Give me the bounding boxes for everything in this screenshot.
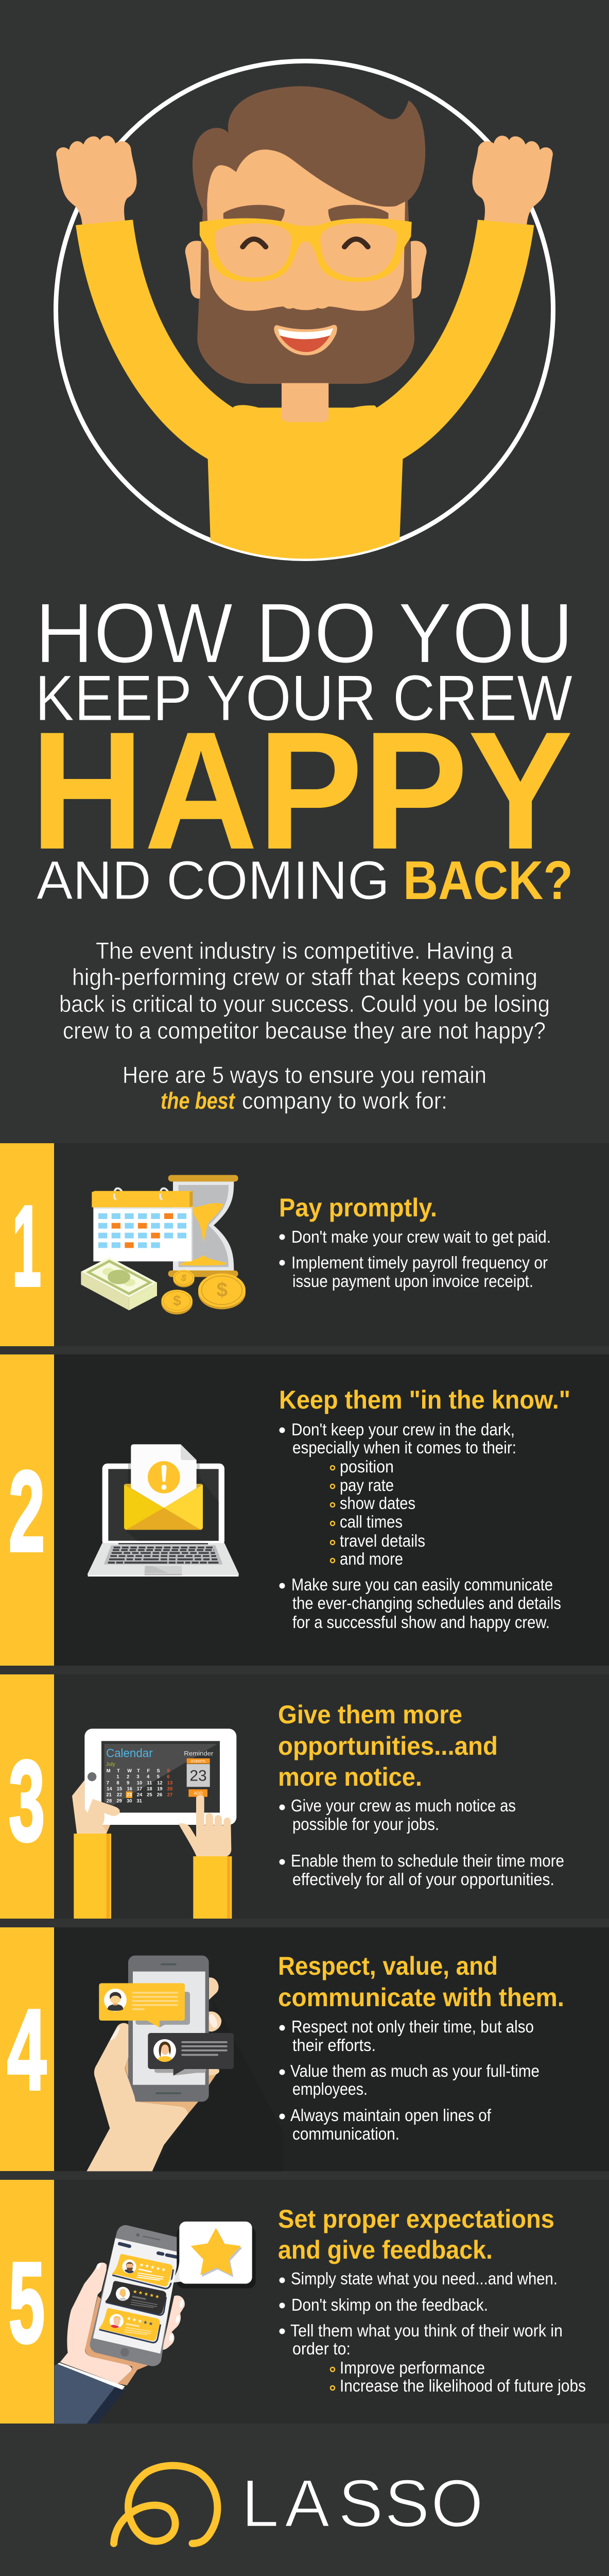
panel: step 1 pay promptly: [0, 1143, 609, 1346]
icon: hands holding tablet calendar: 24: [137, 1792, 143, 1798]
icon: hand holding phone with star reviews: [55, 2222, 256, 2424]
icon: hand holding phone with star reviews: ★: [145, 2264, 149, 2269]
bullet: keep crew informed: Don't keep your crew in the dark,: [291, 1420, 515, 1439]
intro call to action: Here are 5 ways to ensure you remain: [123, 1062, 486, 1088]
bullet list: issue payment upon invoice receipt.: [292, 1272, 533, 1291]
number bar 5: 5: [9, 2239, 45, 2367]
icon: hands holding tablet calendar: 31: [136, 1798, 142, 1803]
icon: hands holding tablet calendar: W: [127, 1768, 132, 1773]
number bar 4: [0, 1927, 54, 2171]
title: [30, 586, 573, 911]
face: [207, 149, 405, 311]
icon: hands holding tablet calendar: [72, 1728, 236, 1919]
bullet list: [279, 2269, 586, 2395]
sub-list: details: show dates: [340, 1494, 415, 1513]
bullet list: Value them as much as your full-time: [290, 2061, 540, 2080]
panel: step 2 keep them in the know: [0, 1354, 609, 1666]
icon: hand holding phone with star reviews: ★: [132, 2317, 137, 2323]
glasses: [200, 218, 412, 282]
bullet list: possible for your jobs.: [292, 1815, 439, 1834]
bullet list: Give your crew as much notice as: [291, 1796, 516, 1815]
icon: hands holding tablet calendar: 14: [107, 1786, 112, 1791]
bullet: keep crew informed: especially when it comes to their:: [292, 1438, 516, 1457]
bullet: communicate schedules: [279, 1575, 561, 1632]
bullet list: Simply state what you need...and when.: [291, 2269, 558, 2288]
heading: give them more opportunities: opportunities...and: [278, 1732, 498, 1760]
icon: hand holding phone with star reviews: ★: [143, 2320, 148, 2326]
icon: hand holding phone with chat bubbles: [86, 1956, 283, 2171]
icon: hands holding tablet calendar: 1: [116, 1774, 119, 1780]
icon: hand holding phone with star reviews: ★: [150, 2265, 155, 2270]
number bar 3: 3: [9, 1737, 45, 1865]
bullet list: Respect not only their time, but also: [291, 2017, 534, 2036]
icon: hands holding tablet calendar: 10: [137, 1780, 142, 1785]
bullet: communicate schedules: Make sure you can easily communicate: [291, 1575, 553, 1594]
heading: set proper expectations: [278, 2205, 554, 2264]
raised arms and shoulders: [76, 220, 534, 459]
icon: hands holding tablet calendar: 2: [127, 1774, 129, 1780]
bullet: keep crew informed: [279, 1420, 516, 1457]
icon: hand holding phone with star reviews: ★: [127, 2316, 131, 2322]
icon: hand holding phone with star reviews: ★: [155, 2294, 160, 2300]
icon: hands holding tablet calendar: 27: [167, 1792, 172, 1798]
icon: calendar, hourglass and money: [81, 1175, 246, 1314]
intro paragraph: [59, 938, 550, 1044]
icon: hand holding phone with star reviews: ★: [144, 2292, 149, 2297]
number bar 1: [0, 1143, 54, 1346]
panel: step 3 give more opportunities: [0, 1674, 609, 1919]
icon: hands holding tablet calendar: 15: [117, 1786, 122, 1791]
bullet list: employees.: [292, 2079, 368, 2098]
intro paragraph: high-performing crew or staff that keeps coming: [72, 964, 537, 990]
heading: set proper expectations: and give feedback.: [278, 2235, 493, 2264]
sub-list: details: position: [340, 1457, 394, 1476]
bullet list: Don't skimp on the feedback.: [291, 2295, 488, 2314]
icon: hands holding tablet calendar: 8: [116, 1780, 119, 1785]
illustration: happy bearded man in circle: [56, 61, 553, 578]
icon: hands holding tablet calendar: ADD: [194, 1791, 203, 1796]
title line: keep your crew: KEEP YOUR CREW: [35, 663, 572, 734]
bullet list: effectively for all of your opportunities.: [292, 1870, 554, 1889]
icon: hand holding phone with star reviews: ★: [133, 2289, 137, 2295]
icon: hand holding phone with star reviews: ★: [138, 2291, 143, 2296]
heading: give them more opportunities: more notice.: [278, 1762, 422, 1791]
icon: hand holding phone with star reviews: ★: [161, 2267, 166, 2273]
bullet list: [279, 1796, 564, 1889]
fists: [56, 135, 137, 226]
logo: lasso: [114, 2465, 483, 2544]
bullet list: Implement timely payroll frequency or: [291, 1253, 548, 1272]
bullet list: Tell them what you think of their work in: [290, 2321, 563, 2340]
panel: step 5 expectations and feedback: [0, 2180, 609, 2424]
intro call to action: company to work for:: [242, 1088, 447, 1114]
icon: hand holding phone with star reviews: ★: [137, 2319, 142, 2325]
icon: hands holding tablet calendar: July: [106, 1762, 115, 1768]
icon: hands holding tablet calendar: 17: [137, 1786, 142, 1791]
bullet list: Increase the likelihood of future jobs: [340, 2376, 586, 2395]
icon: hand holding phone with star reviews: ★: [156, 2266, 161, 2272]
number bar 2: [0, 1354, 54, 1666]
icon: hands holding tablet calendar: 7: [107, 1780, 109, 1785]
bullet list: Improve performance: [340, 2358, 485, 2377]
ears: [185, 241, 427, 299]
sub-list: details: call times: [340, 1512, 403, 1531]
number bar 2: 2: [9, 1448, 45, 1575]
title word: back: BACK?: [403, 850, 573, 911]
icon: hand holding phone with star reviews: ★: [149, 2293, 154, 2299]
icon: hands holding tablet calendar: 19: [157, 1786, 163, 1791]
bullet list: Don't make your crew wait to get paid.: [291, 1227, 551, 1246]
icon: hands holding tablet calendar: 22: [117, 1792, 122, 1798]
icon: hands holding tablet calendar: T: [137, 1768, 140, 1773]
icon: hands holding tablet calendar: F: [147, 1768, 150, 1773]
icon: hands holding tablet calendar: M: [107, 1768, 111, 1773]
title word: happy: HAPPY: [30, 697, 573, 885]
icon: hands holding tablet calendar: 13: [167, 1780, 172, 1785]
sub-list: details: [330, 1457, 425, 1568]
bullet list: [279, 2017, 540, 2143]
hair and beard: [193, 86, 425, 384]
bullet list: Enable them to schedule their time more: [291, 1851, 564, 1870]
icon: hands holding tablet calendar: 30: [127, 1798, 132, 1803]
mouth: [274, 325, 337, 355]
logo wordmark: LASSO: [241, 2465, 483, 2541]
sub-list: details: and more: [340, 1549, 403, 1568]
heading: give them more opportunities: [278, 1700, 498, 1791]
icon: hands holding tablet calendar: 9: [127, 1780, 129, 1785]
bullet: communicate schedules: for a successful show and happy crew.: [292, 1613, 550, 1632]
heading: keep them in the know: Keep them "in the know.": [279, 1385, 570, 1414]
icon: hands holding tablet calendar: 16: [127, 1786, 132, 1791]
heading: pay promptly: Pay promptly.: [279, 1193, 437, 1222]
icon: hands holding tablet calendar: 3: [136, 1774, 140, 1780]
heading: respect value communicate: Respect, value, and: [278, 1952, 498, 1980]
bullet list: [279, 1227, 551, 1291]
number bar 1: 1: [12, 1182, 41, 1310]
smiling eyes: [243, 239, 368, 247]
heading: set proper expectations: Set proper expectations: [278, 2205, 554, 2233]
intro call to action: the best: [161, 1088, 236, 1114]
bullet list: their efforts.: [292, 2036, 376, 2055]
icon: hand holding phone with star reviews: ★: [149, 2321, 153, 2327]
icon: hands holding tablet calendar: 25: [147, 1792, 152, 1798]
bullet list: communication.: [292, 2124, 399, 2143]
title line: and coming: AND COMING: [37, 850, 390, 911]
title line: how do you: HOW DO YOU: [35, 586, 573, 681]
icon: calendar, hourglass and money: $: [173, 1293, 181, 1309]
icon: hands holding tablet calendar: T: [117, 1768, 120, 1773]
icon: hands holding tablet calendar: 11: [147, 1780, 152, 1785]
intro paragraph: crew to a competitor because they are not happy?: [63, 1018, 546, 1044]
icon: hands holding tablet calendar: 23: [127, 1792, 132, 1798]
icon: hands holding tablet calendar: 20: [167, 1786, 172, 1791]
icon: hands holding tablet calendar: S: [157, 1768, 160, 1773]
icon: hand holding phone with star reviews: ★: [140, 2262, 144, 2268]
intro paragraph: The event industry is competitive. Having a: [96, 938, 513, 964]
heading: respect value communicate: [278, 1952, 564, 2012]
icon: hands holding tablet calendar: 23: [189, 1768, 207, 1785]
number bar 3: [0, 1674, 54, 1919]
eyebrows: [223, 205, 389, 222]
bullet list: order to:: [292, 2339, 351, 2358]
heading: give them more opportunities: Give them more: [278, 1700, 462, 1729]
icon: hands holding tablet calendar: 29: [116, 1798, 122, 1803]
icon: hands holding tablet calendar: 4: [147, 1774, 150, 1780]
bullet list: Always maintain open lines of: [290, 2106, 492, 2125]
heading: respect value communicate: communicate with them.: [278, 1983, 564, 2012]
icon: hands holding tablet calendar: EVENTS: [191, 1760, 205, 1764]
icon: hands holding tablet calendar: 21: [106, 1792, 112, 1798]
sub-list: details: travel details: [340, 1531, 425, 1550]
number bar 5: [0, 2180, 54, 2424]
icon: hands holding tablet calendar: 12: [157, 1780, 163, 1785]
sub-list: details: pay rate: [340, 1476, 394, 1495]
icon: hands holding tablet calendar: Calendar: [106, 1747, 153, 1760]
icon: hands holding tablet calendar: 26: [157, 1792, 162, 1798]
icon: hands holding tablet calendar: 6: [167, 1774, 170, 1780]
icon: hands holding tablet calendar: Reminder: [184, 1750, 213, 1757]
intro paragraph: back is critical to your success. Could you be losing: [59, 991, 550, 1017]
icon: hands holding tablet calendar: 5: [157, 1774, 160, 1780]
icon: hands holding tablet calendar: S: [167, 1768, 170, 1773]
icon: calendar, hourglass and money: $: [217, 1279, 228, 1301]
icon: hands holding tablet calendar: 18: [147, 1786, 152, 1791]
panel: step 4 respect and communicate: [0, 1927, 609, 2171]
logo mark: rope loop: [114, 2466, 217, 2544]
bullet: communicate schedules: the ever-changing schedules and details: [292, 1594, 561, 1613]
icon: laptop with envelope alert: [88, 1444, 239, 1577]
icon: hands holding tablet calendar: 28: [107, 1798, 112, 1803]
icon: calendar, hourglass and money: $: [180, 1272, 188, 1284]
intro call to action: [123, 1062, 486, 1114]
neck: [282, 383, 328, 423]
number bar 4: 4: [7, 1986, 46, 2114]
